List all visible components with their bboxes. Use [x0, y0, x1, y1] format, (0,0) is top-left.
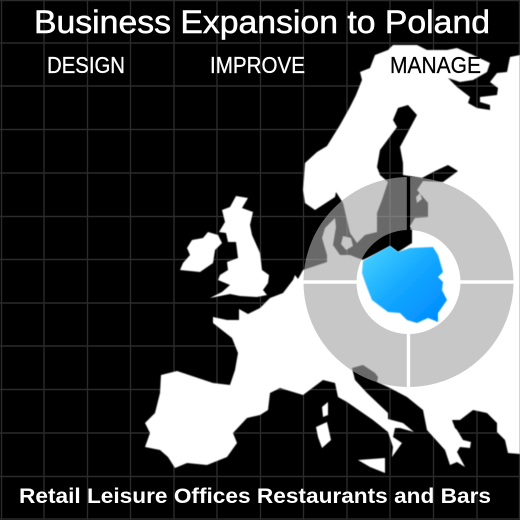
label: manage: MANAGE [390, 52, 481, 78]
label: design: DESIGN [47, 52, 125, 78]
ring segment: top right [410, 177, 514, 280]
sectors line: Retail Leisure Offices Restaurants and Bars [19, 485, 491, 508]
Poland highlighted in blue [362, 246, 447, 323]
Sardinia [316, 422, 331, 448]
ring segment: bottom right [410, 284, 514, 387]
Sicily [358, 458, 385, 473]
Danish islands [341, 236, 353, 250]
Great Britain [210, 196, 269, 298]
Corsica [322, 402, 328, 417]
label: improve: IMPROVE [210, 52, 305, 78]
mainland Europe [145, 45, 520, 468]
ring segment: top left [304, 177, 407, 280]
Ireland [180, 232, 222, 272]
Saaremaa island [416, 193, 422, 203]
title: Business Expansion to Poland [34, 4, 490, 40]
segmented ring around Poland [304, 177, 514, 387]
map of Europe [145, 45, 520, 473]
ring segment: bottom left [304, 284, 407, 387]
